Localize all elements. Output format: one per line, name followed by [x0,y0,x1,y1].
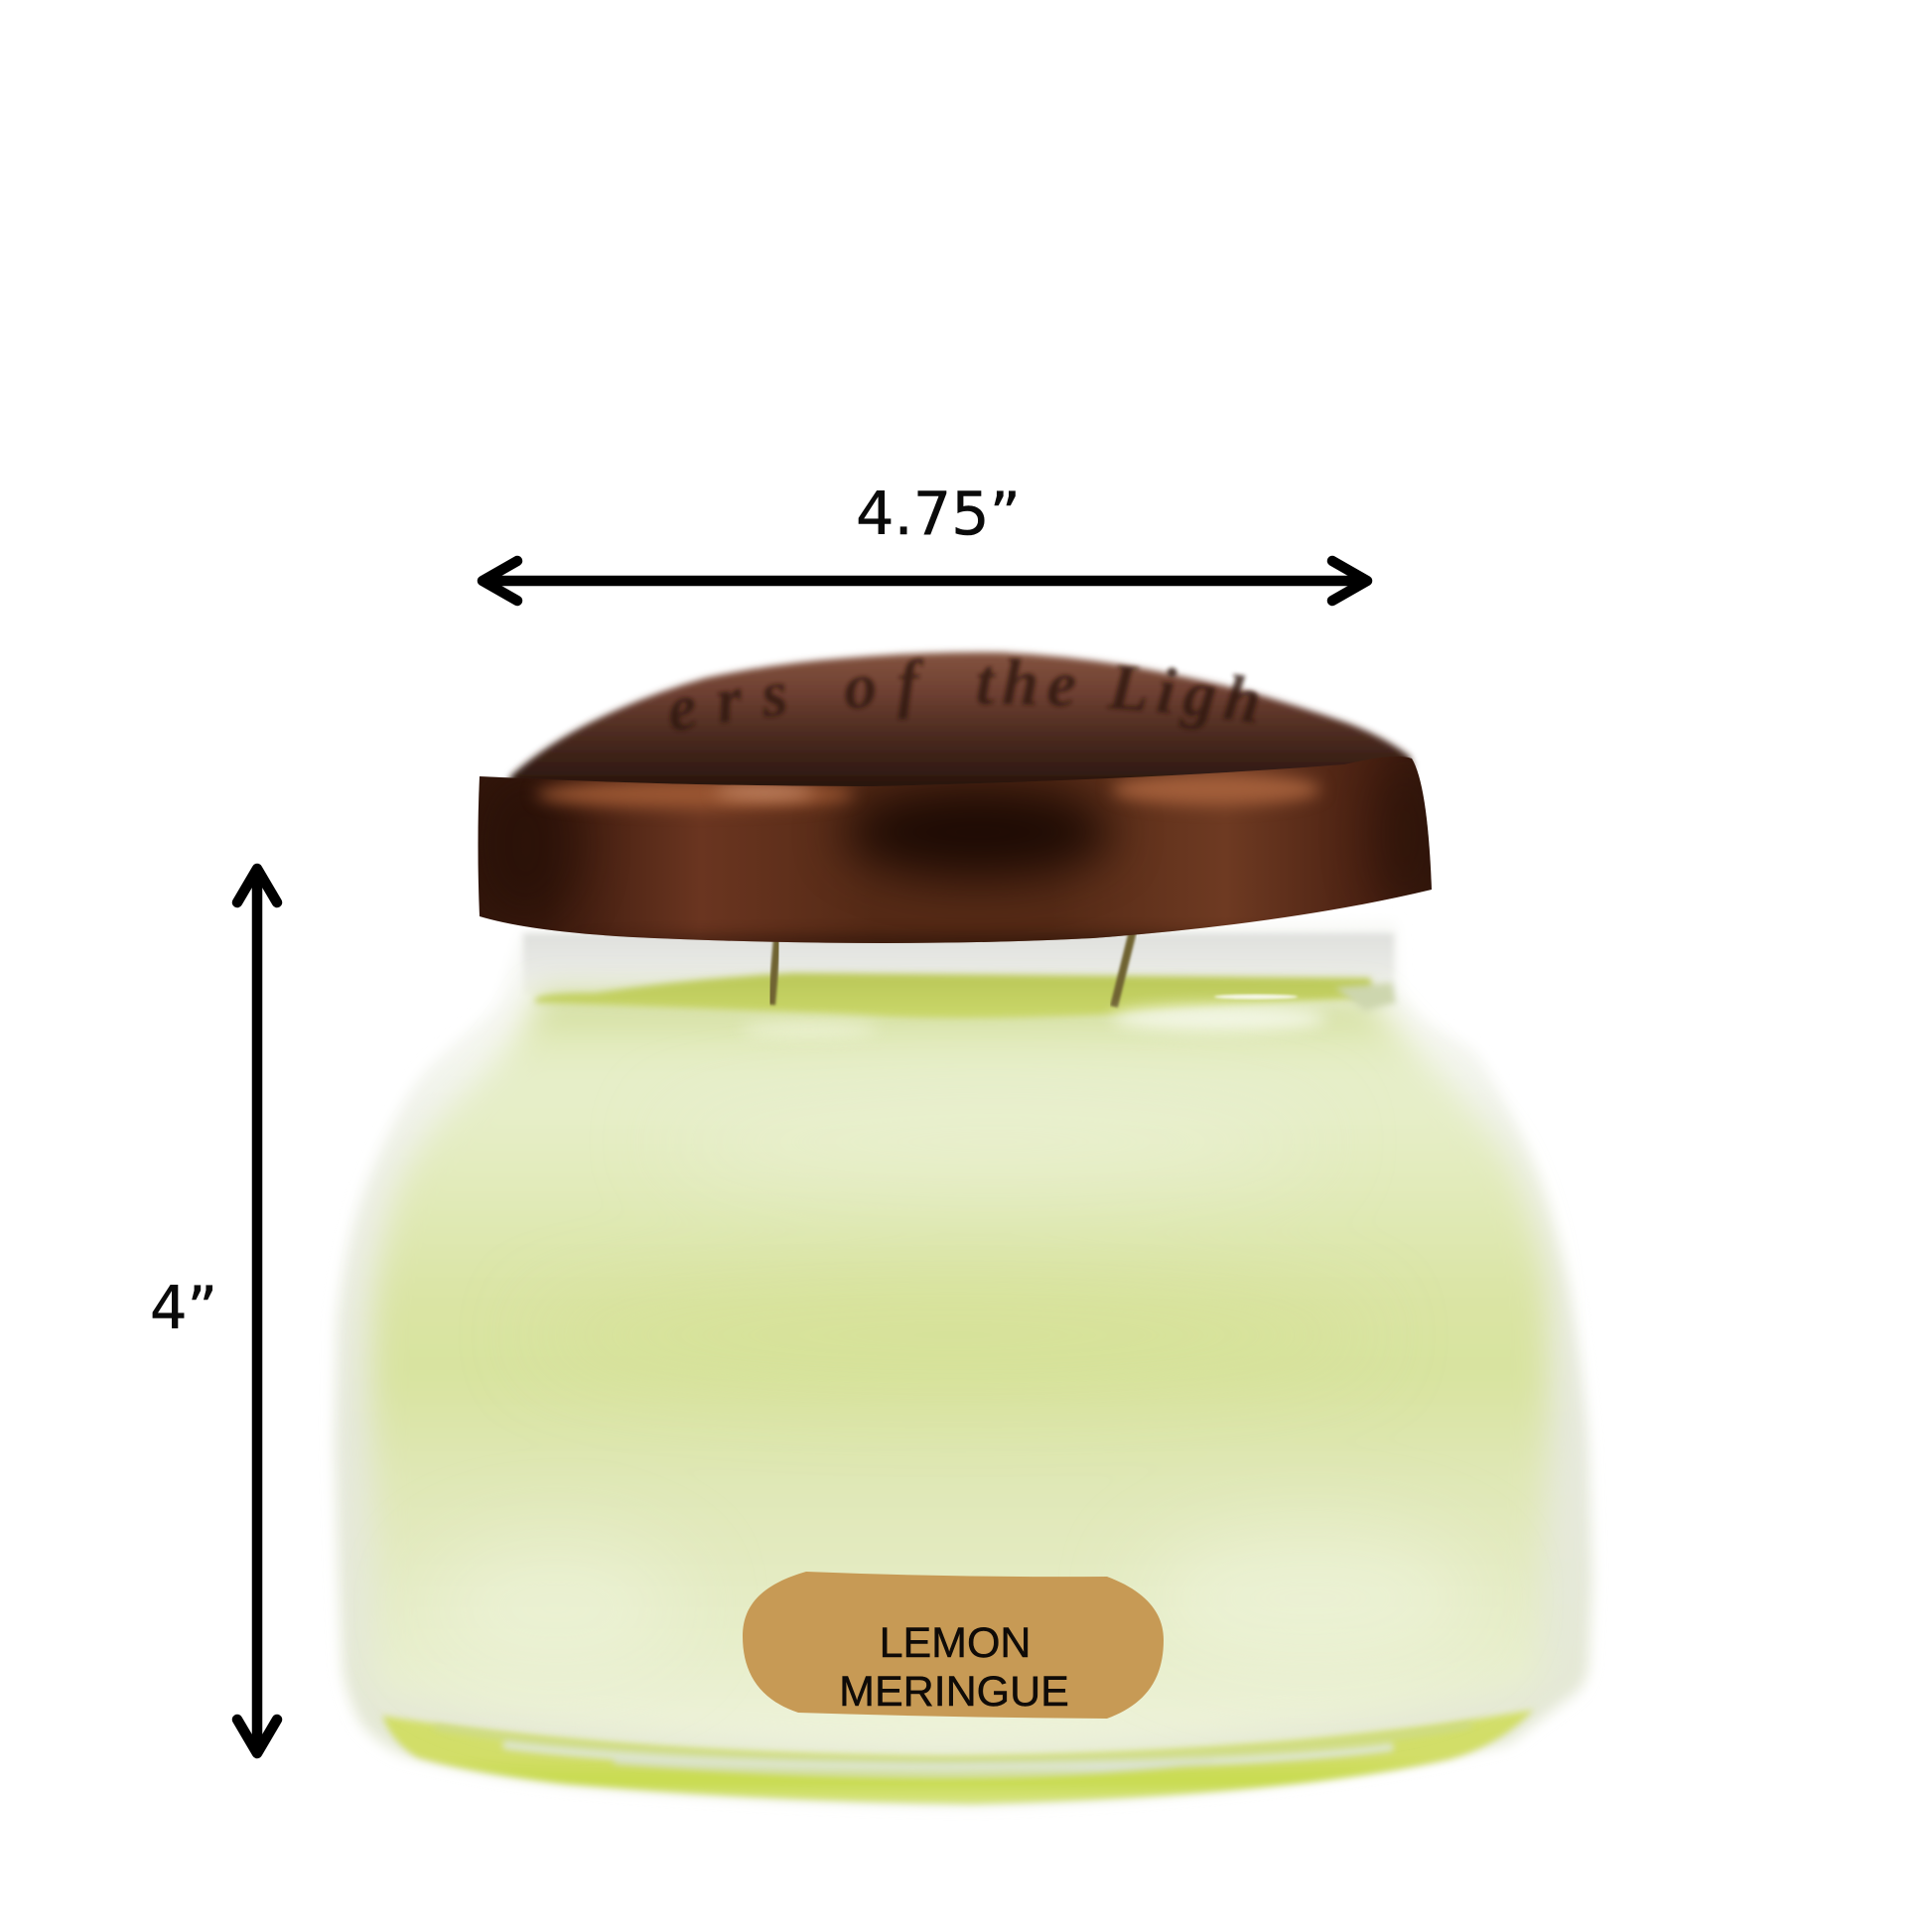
label shape [743,1572,1164,1719]
lid dome [506,652,1414,794]
wax body [371,993,1549,1753]
wax highlights [740,995,1326,1036]
label text: LEMON [880,1619,1031,1667]
infographic: candle jar dimensions [153,490,1597,1811]
lid rim band [479,757,1432,943]
height arrow [237,869,277,1753]
rim base colour [479,757,1432,943]
width arrow [483,561,1367,601]
jar glass silhouette [335,923,1592,1804]
lid [479,646,1432,943]
width label: 4.75” [856,480,1021,549]
wick left [771,938,777,1005]
wick right [1114,931,1133,1007]
candle jar [335,923,1592,1804]
base glass stripes [437,1725,1469,1775]
wax tone patches [427,1104,1479,1678]
jar base in lime glass [382,1710,1534,1804]
lid engraved text: ers of the Ligh [669,655,1261,732]
rim lighting [479,760,1432,943]
melted wax pool [535,973,1375,1018]
label text: MERINGUE [839,1668,1069,1716]
jar neck glass [523,933,1394,995]
height label: 4” [150,1274,217,1343]
jar label [743,1572,1164,1719]
neck right corner tint [1335,983,1396,1011]
